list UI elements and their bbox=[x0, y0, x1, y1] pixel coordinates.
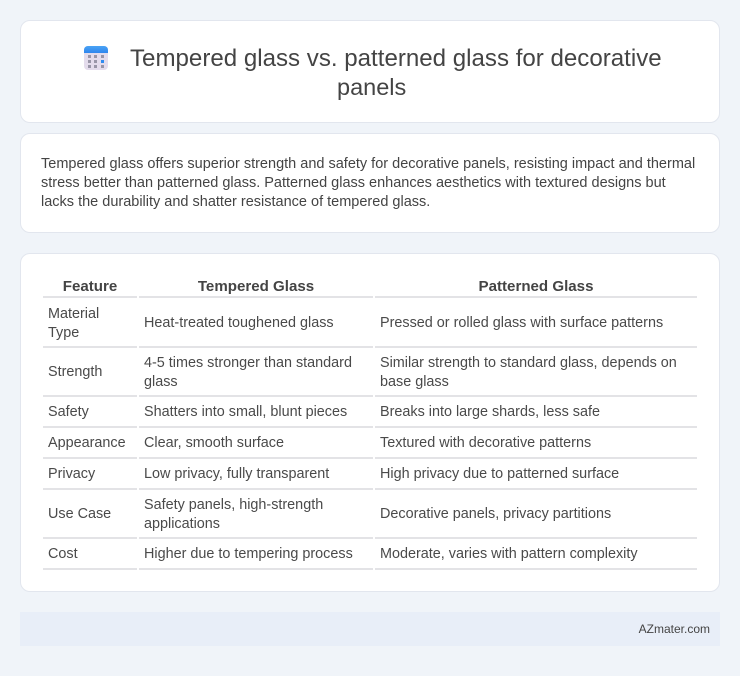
comparison table: Safety panels, high-strength bbox=[144, 497, 323, 513]
title bbox=[130, 45, 662, 100]
comparison table: Material bbox=[48, 306, 99, 322]
comparison table: Higher due to tempering process bbox=[144, 546, 353, 562]
comparison table: Shatters into small, blunt pieces bbox=[144, 404, 347, 420]
summary text: lacks the durability and shatter resistance of tempered glass. bbox=[41, 194, 430, 210]
comparison table: base glass bbox=[380, 374, 449, 390]
title: panels bbox=[337, 74, 406, 100]
comparison table: Patterned Glass bbox=[479, 278, 593, 295]
table panel bbox=[20, 253, 720, 592]
summary text bbox=[41, 156, 695, 210]
title: Tempered glass vs. patterned glass for decorative bbox=[130, 45, 662, 72]
comparison table: applications bbox=[144, 516, 220, 532]
comparison table: Feature bbox=[63, 278, 117, 295]
comparison table: Appearance bbox=[48, 435, 126, 451]
comparison table: Safety bbox=[48, 404, 89, 420]
summary panel bbox=[20, 133, 720, 233]
comparison table: glass bbox=[144, 374, 178, 390]
comparison table: Similar strength to standard glass, depends on bbox=[380, 355, 677, 371]
comparison table: Privacy bbox=[48, 466, 95, 482]
comparison table: Type bbox=[48, 325, 79, 341]
comparison table: Textured with decorative patterns bbox=[380, 435, 591, 451]
footer bar bbox=[20, 612, 720, 646]
comparison table: Strength bbox=[48, 364, 102, 380]
comparison table: Heat-treated toughened glass bbox=[144, 315, 334, 331]
comparison table: Moderate, varies with pattern complexity bbox=[380, 546, 638, 562]
icon: calendar bbox=[84, 46, 108, 70]
comparison table: Use Case bbox=[48, 506, 111, 522]
comparison table: Low privacy, fully transparent bbox=[144, 466, 329, 482]
comparison table: 4-5 times stronger than standard bbox=[144, 355, 352, 371]
footer text: AZmater.com bbox=[639, 622, 710, 636]
summary text: Tempered glass offers superior strength and safety for decorative panels, resisting impact and thermal bbox=[41, 156, 695, 172]
title panel bbox=[20, 20, 720, 123]
comparison table: High privacy due to patterned surface bbox=[380, 466, 619, 482]
comparison table: Tempered Glass bbox=[198, 278, 314, 295]
comparison table: Breaks into large shards, less safe bbox=[380, 404, 600, 420]
comparison table: Decorative panels, privacy partitions bbox=[380, 506, 611, 522]
comparison table: Pressed or rolled glass with surface patterns bbox=[380, 315, 663, 331]
summary text: stress better than patterned glass. Patterned glass enhances aesthetics with textured designs but bbox=[41, 175, 666, 191]
comparison table: Cost bbox=[48, 546, 78, 562]
comparison table: Clear, smooth surface bbox=[144, 435, 284, 451]
